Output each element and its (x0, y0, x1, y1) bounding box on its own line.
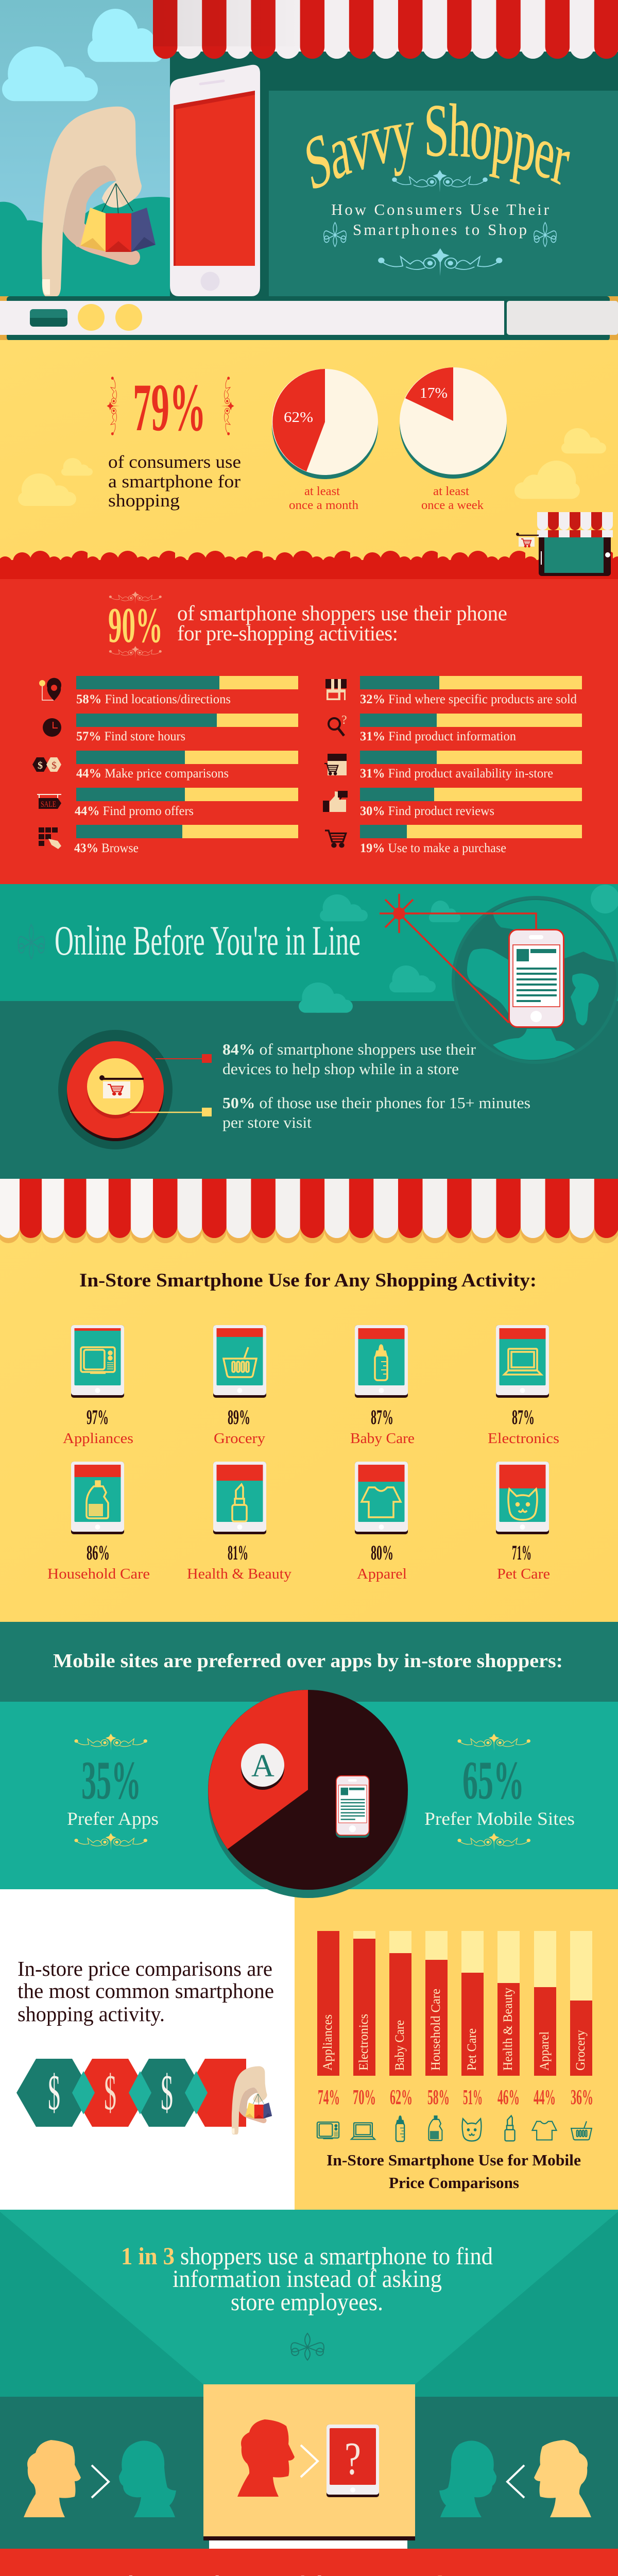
79 percent caption: a smartphone for (108, 471, 241, 492)
icon: thumbs up (323, 791, 348, 812)
globe (453, 897, 618, 1062)
red head silhouette (237, 2419, 295, 2497)
category labels row one: Appliances (63, 1430, 133, 1447)
price comparison text: shopping activity. (18, 2002, 165, 2026)
subtitle line two: Smartphones to Shop (353, 221, 527, 239)
65 percent stat: 65% (462, 1750, 524, 1810)
heading mobile sites: Mobile sites are preferred over apps by in-store shoppers: (53, 1650, 563, 1672)
red callout connector (156, 1054, 212, 1063)
activity bars left (76, 676, 298, 838)
title Savvy Shopper (306, 103, 570, 189)
right chevron (507, 2465, 524, 2498)
online section light background (0, 884, 618, 1002)
mobile sites heading band (0, 1622, 618, 1702)
ornament above 65 percent (458, 1734, 530, 1751)
pie label monthly: at least (304, 485, 340, 498)
yellow comparison panel (295, 1889, 618, 2210)
bar percent values: 62% (390, 2085, 413, 2109)
tablet with question mark (327, 2425, 379, 2497)
bar labels: Grocery (574, 2030, 588, 2071)
activity labels right (360, 692, 577, 855)
1 in 3 statement: 1 in 3 shoppers use a smartphone to find (121, 2243, 493, 2270)
bar chart title: Price Comparisons (389, 2174, 519, 2192)
79 percent caption: of consumers use (108, 452, 241, 472)
icon: sale sign: SALE (41, 800, 56, 809)
pie label weekly: once a week (421, 499, 484, 512)
left woman silhouette (119, 2441, 176, 2517)
1 in 3 section background (0, 2210, 618, 2397)
ornament under title (392, 170, 487, 192)
ornament below 90 percent (109, 646, 161, 658)
ornament above 90 percent (109, 591, 161, 604)
right woman silhouette (439, 2441, 496, 2517)
bar percent values: 58% (427, 2085, 450, 2109)
header sky background (0, 0, 170, 297)
ornament right of subtitle (534, 223, 556, 247)
bar chart title: In-Store Smartphone Use for Mobile (327, 2151, 581, 2169)
prefer apps label: Prefer Apps (67, 1808, 159, 1829)
icon: shopping cart (325, 831, 346, 847)
pre-shopping heading: for pre-shopping activities: (177, 621, 398, 645)
stat 50 percent text: 50% of those use their phones for 15+ minutes (222, 1094, 530, 1112)
percent values row two: 80% (371, 1541, 393, 1564)
activity labels right: 30% Find product reviews (360, 804, 494, 818)
bar percent values: 36% (571, 2085, 593, 2109)
dark band (0, 2397, 618, 2549)
bar percent values: 51% (463, 2085, 483, 2109)
yellow in-store section background (0, 1179, 618, 1622)
yellow callout connector (130, 1108, 212, 1116)
pie label weekly (421, 485, 484, 512)
tablet apparel (355, 1462, 408, 1534)
pie chart monthly 62 percent: 62% (284, 409, 313, 426)
tablet grocery (213, 1325, 266, 1398)
bar percent values (318, 2085, 593, 2109)
79 percent caption (108, 452, 241, 511)
tablet with question mark: ? (345, 2433, 361, 2484)
hand holding shopping bags (42, 107, 156, 296)
pie chart monthly 62 percent (272, 369, 378, 479)
stat 84 percent text: devices to help shop while in a store (222, 1060, 459, 1078)
heading Online Before You're in Line: Online Before You're in Line (55, 917, 360, 964)
category labels row one (63, 1430, 559, 1447)
pie label monthly: once a month (289, 499, 358, 512)
bar percent values: 46% (497, 2085, 520, 2109)
pie chart weekly 17 percent: 17% (420, 385, 448, 401)
right man silhouette (534, 2440, 591, 2517)
subtitle line one: How Consumers Use Their (331, 200, 550, 218)
ornament left of 79 percent (107, 377, 120, 435)
app icon: A (251, 1749, 274, 1784)
knot ornament center (291, 2333, 324, 2360)
percent values row one: 89% (228, 1405, 250, 1429)
awning top (153, 0, 618, 59)
pre-shopping heading: of smartphone shoppers use their phone (177, 601, 507, 625)
35 percent stat: 35% (81, 1750, 141, 1810)
icon: price hexagons (32, 757, 61, 772)
percent values row one: 87% (512, 1405, 535, 1429)
red scalloped band (0, 551, 618, 579)
white comparison panel (0, 1889, 295, 2210)
79 percent caption: shopping (108, 490, 180, 511)
center chevron (301, 2445, 318, 2477)
tablet household care (71, 1462, 124, 1534)
phone with web page (509, 929, 563, 1027)
price hexagons: $ (48, 2065, 60, 2121)
price hexagons: $ (104, 2065, 116, 2121)
stat 50 percent text: per store visit (222, 1113, 312, 1131)
stat 50 percent text (222, 1094, 530, 1131)
tablet electronics (496, 1325, 549, 1398)
bar chart title (327, 2151, 581, 2192)
green hills (0, 197, 170, 297)
pie chart weekly 17 percent (400, 367, 507, 479)
bar labels: Household Care (429, 1989, 443, 2071)
ornament above 35 percent (75, 1734, 147, 1751)
center yellow panel (203, 2384, 415, 2549)
mini store (516, 512, 613, 576)
icon: price hexagons: $ (52, 760, 57, 771)
knot ornament (18, 925, 44, 959)
red section background (0, 579, 618, 884)
icon: grid and pointer (39, 827, 61, 849)
bar percent values: 74% (318, 2085, 340, 2109)
storefront wall (170, 52, 618, 297)
icon: sale sign (37, 794, 61, 809)
cloud left (2, 46, 98, 101)
79 percent stat: 79% (133, 369, 206, 445)
pale clouds (18, 428, 606, 506)
pre-shopping heading (177, 601, 507, 645)
tablet health and beauty (213, 1462, 266, 1534)
percent values row one (87, 1405, 535, 1429)
category labels row one: Electronics (488, 1430, 559, 1447)
price hexagons (16, 2059, 246, 2127)
bar category icons (317, 2116, 592, 2141)
category labels row two: Household Care (47, 1566, 150, 1582)
category labels row two: Apparel (357, 1566, 407, 1582)
1 in 3 statement (121, 2243, 493, 2316)
cloud top (88, 9, 165, 62)
category labels row two (47, 1566, 550, 1582)
icon: store with cart (324, 754, 347, 775)
activity labels left: 43% Browse (74, 841, 139, 855)
phone icon in pie (336, 1776, 369, 1838)
stat 84 percent text: 84% of smartphone shoppers use their (222, 1040, 476, 1058)
left man silhouette (24, 2440, 81, 2517)
heading in-store use: In-Store Smartphone Use for Any Shopping Activity: (79, 1270, 537, 1291)
bar percent values: 70% (353, 2085, 376, 2109)
left chevron (92, 2465, 109, 2498)
activity labels left (74, 692, 231, 855)
price hexagons: $ (161, 2065, 173, 2121)
small hand with bags (232, 2066, 272, 2134)
title Savvy Shopper: Savvy Shopper (306, 103, 570, 189)
percent values row one: 87% (371, 1405, 393, 1429)
bar percent values: 44% (534, 2085, 556, 2109)
percent values row two (87, 1541, 531, 1564)
price comparison text: In-store price comparisons are (18, 1957, 272, 1980)
stat 84 percent text (222, 1040, 476, 1078)
category labels row two: Health & Beauty (187, 1566, 292, 1582)
category labels row one: Baby Care (350, 1430, 415, 1447)
app icon (241, 1743, 284, 1790)
preference pie chart (208, 1690, 408, 1898)
icon: clock (43, 718, 61, 737)
pie label weekly: at least (433, 485, 469, 498)
activity labels left: 57% Find store hours (76, 730, 185, 743)
spend more section background (0, 2549, 618, 2576)
bar labels: Electronics (357, 2014, 371, 2071)
icon: storefront (325, 679, 347, 700)
activity labels left: 58% Find locations/directions (76, 692, 231, 706)
mobile sites teal panel (0, 1702, 618, 1889)
icon: magnifier (329, 714, 347, 736)
percent values row two: 86% (87, 1541, 110, 1564)
prefer mobile sites label: Prefer Mobile Sites (424, 1808, 575, 1829)
bar labels: Apparel (538, 2031, 552, 2071)
bar labels (321, 1988, 588, 2071)
price comparison text (18, 1957, 274, 2026)
activity labels right: 19% Use to make a purchase (360, 841, 506, 855)
activity labels right: 32% Find where specific products are sold (360, 692, 577, 706)
storefront title panel (269, 91, 618, 297)
percent values row two: 81% (228, 1541, 248, 1564)
header phone (170, 65, 260, 296)
percent values row one: 97% (87, 1405, 109, 1429)
online section dark background (0, 1001, 618, 1179)
bar labels: Baby Care (393, 2020, 407, 2071)
bar labels: Appliances (321, 2014, 335, 2071)
text: 71% (512, 1541, 531, 1564)
ornament under subtitle (379, 248, 502, 276)
tablet appliances (71, 1325, 124, 1398)
icon: map pin (39, 678, 61, 701)
ornament left of subtitle (324, 223, 346, 247)
icon: price hexagons: $ (38, 760, 43, 771)
red connector lines and star (380, 894, 536, 1023)
activity labels right: 31% Find product availability in-store (360, 767, 553, 781)
activity bars right (360, 676, 582, 838)
1 in 3 statement: store employees. (231, 2289, 383, 2316)
activity labels right: 31% Find product information (360, 730, 516, 743)
ornament below 35 percent (75, 1833, 147, 1850)
category labels row one: Grocery (214, 1430, 266, 1447)
bar labels: Health & Beauty (501, 1988, 515, 2071)
ornament below 65 percent (458, 1833, 530, 1850)
awning middle (0, 1179, 618, 1238)
pie label monthly (289, 485, 358, 512)
90 percent stat: 90% (108, 598, 163, 653)
bar labels: Pet Care (465, 2028, 479, 2071)
ornament right of 79 percent (221, 377, 234, 435)
activity labels left: 44% Make price comparisons (76, 767, 229, 781)
icon: magnifier: ? (341, 714, 347, 727)
category labels row two: Pet Care (497, 1566, 550, 1582)
activity labels left: 44% Find promo offers (75, 804, 194, 818)
teal clouds (299, 885, 618, 1013)
browser bar header (0, 296, 618, 341)
yellow stats section background (0, 340, 618, 567)
target circle with store sign (58, 1030, 173, 1149)
stacked bar chart (317, 1931, 592, 2076)
price comparison text: the most common smartphone (18, 1979, 274, 2003)
1 in 3 statement: information instead of asking (173, 2265, 442, 2293)
tablet baby care (355, 1325, 408, 1398)
tablet pet care (496, 1462, 549, 1534)
